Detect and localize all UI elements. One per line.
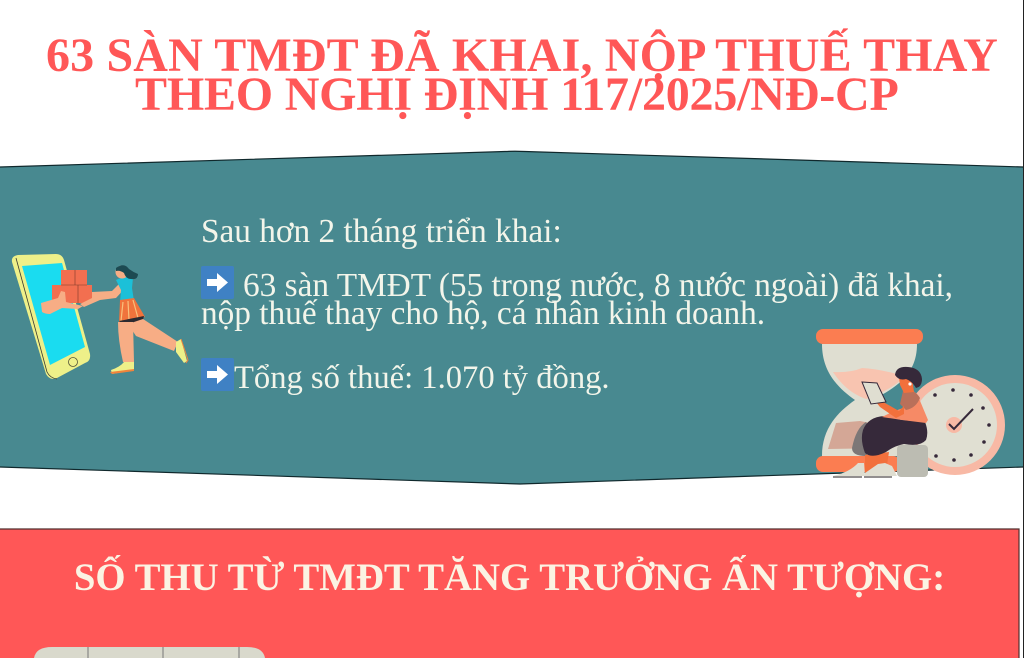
title: THEO NGHỊ ĐỊNH 117/2025/NĐ-CP <box>135 68 899 121</box>
icon: phone delivery woman <box>12 254 188 379</box>
hourglass <box>816 329 923 472</box>
icon: boxes <box>52 270 92 303</box>
reading woman <box>833 367 928 477</box>
text: total tax: Tổng số thuế: 1.070 tỷ đồng. <box>234 360 610 396</box>
title: 63 SÀN TMĐT ĐÃ KHAI, NỘP THUẾ THAY <box>46 29 998 82</box>
text: intro: Sau hơn 2 tháng triển khai: <box>201 213 562 250</box>
icon: arrow 2 <box>201 358 234 391</box>
icon: hourglass, clock and reading woman <box>816 329 1005 477</box>
table header <box>34 647 265 658</box>
text: platforms: 63 sàn TMĐT (55 trong nước, 8 nước ngoài) đã khai, <box>243 267 953 304</box>
icon: arrow 1 <box>201 266 234 299</box>
clock <box>905 375 1005 475</box>
panel: teal banner <box>0 151 1023 484</box>
title <box>46 28 998 121</box>
text: platforms line 2: nộp thuế thay cho hộ, cá nhân kinh doanh. <box>201 295 765 332</box>
heading: revenue growth: SỐ THU TỪ TMĐT TĂNG TRƯỞNG ẤN TƯỢNG: <box>74 556 945 599</box>
